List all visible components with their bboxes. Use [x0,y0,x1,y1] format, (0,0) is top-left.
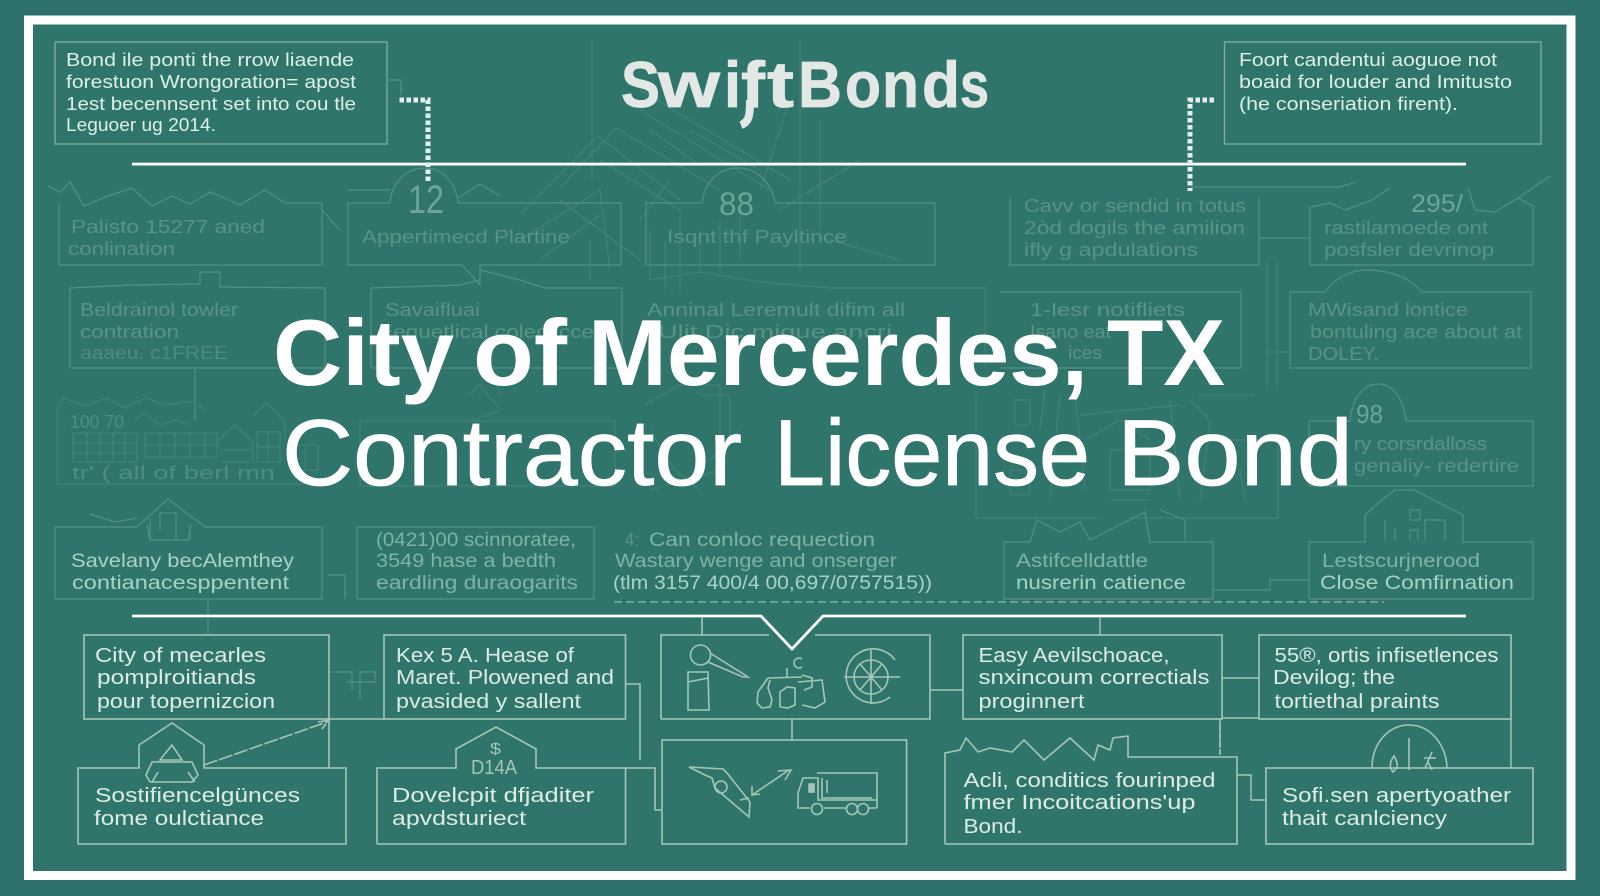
text block: Can conloc requection: Can conloc requection [649,530,875,551]
panel: Acli conditics [945,722,1266,844]
panel: Lestscurjnerood [1213,490,1533,599]
panel row 6 [78,719,1533,844]
logo: S [621,48,660,121]
panel: Acli conditics: Acli, conditics fourinped [964,770,1216,792]
panel: Lestscurjnerood: Lestscurjnerood [1322,551,1480,572]
faded panel: Beldrainol towler: aaaeu. c1FREE [80,342,228,363]
panel: Easy: snxincoum correctials [978,667,1210,689]
panel: Dovelcpit: apvdsturiect [392,808,527,830]
faded panel: Palisto: conlination [68,238,175,259]
panel: Savelany: contianacesppentent [72,572,290,594]
panel: scinnoratee: 3549 hase a bedth [376,551,556,572]
faded panel: Isqnt thf Payltince [646,168,935,265]
faded panel: 295: posfsler devrinop [1324,239,1494,260]
callout: top right [1224,42,1541,144]
faded panel: MWisand lontice: bontuling ace about at [1310,321,1522,342]
dashed connector [614,601,1384,603]
panel: 55: tortiethal praints [1274,691,1440,713]
faded panel: central building [976,390,1278,518]
panel: City of mecarles: pour topernizcion [97,691,275,713]
text block: Can conloc requection: (tlm 3157 400/4 00,697/0757515)) [613,572,932,594]
title line 1: TX [1107,300,1225,405]
panel: icons bottom [662,719,907,844]
panel: 55: 55®, ortis infisetlences [1274,645,1498,667]
title line 2: Contractor [282,400,742,505]
faded blueprint building drawing behind the logo [520,40,900,290]
faded panel: Anninal Leremult: Anninal Leremult difim all [647,299,905,320]
faded panel: Appertimecd Plartine [348,168,621,285]
title line 1: City [273,300,454,405]
panel: scinnoratee: eardling duraogarits [376,573,578,594]
panel: icons top [661,617,930,719]
panel: scinnoratee [328,527,594,599]
logo: f [741,48,765,121]
faded panel: MWisand lontice: MWisand lontice [1308,299,1468,320]
panel: City of mecarles [84,617,375,719]
panel row 4 [55,490,1533,636]
panel: Kex 5 A: Maret. Plowened and [396,667,614,689]
panel: Dovelcpit: D14A [471,757,518,779]
title line 1: of [473,300,568,405]
arrow: diagonal [204,720,329,765]
panel: Kex 5 A [329,635,661,810]
connector: dotted left [400,100,428,183]
faded panel: Palisto [48,182,340,265]
text block: Can conloc requection: Wastary wenge and onserger [615,551,898,572]
icon: vehicle [146,745,198,782]
callout: top left: 1est becennsent set into cou tle [66,94,356,114]
faded panel: Palisto: Palisto 15277 aned [71,216,265,237]
faded panel: Beldrainol towler: Beldrainol towler [80,299,238,320]
faded panel: Cavv or sendid: ifly g apdulations [1024,239,1198,260]
faded panel: Savaifluai: Eequetlical colecticce [378,321,594,342]
divider bottom with notch [132,616,1466,649]
faded panel: 295: rastilamoede ont [1324,217,1488,238]
faded panel: Beldrainol towler: contration [80,321,179,342]
faded panel: skyline and houses [57,398,320,484]
faded panel: Savaifluai: Savaifluai [385,299,480,320]
panel: Sofi.sen: thait canlciency [1282,808,1447,830]
logo: i [724,48,741,121]
panel: Astifcelldattle: nusrerin catience [1016,572,1186,594]
panel: 55: Devilog; the [1273,667,1395,689]
icon: figures [1390,738,1436,772]
icon: person with pencil [688,645,748,710]
panel: Easy: Easy Aevilschoace, [978,645,1170,667]
panel: Sofi.sen [1266,725,1533,844]
panel: Dovelcpit: Dovelcpit dfjaditer [392,785,594,807]
faded panel: Isqnt thf Payltince: Isqnt thf Payltince [667,226,847,247]
panel: Astifcelldattle [1004,510,1213,599]
panel: Sostifiencelgunces: fome oulctiance [94,808,264,830]
faded panel: 295: 295/ [1411,190,1463,218]
faded panel: 1-lesr notifliets: ices [1068,342,1102,363]
panel: Sostifiencelgunces: Sostifiencelgünces [95,785,300,807]
text block: Can conloc requection: 4: [625,529,639,550]
icon: target [844,649,900,704]
logo: s [960,48,989,121]
panel: City of mecarles: City of mecarles [95,645,266,667]
callout: top left [55,42,401,144]
panel: Savelany [55,499,322,636]
panel: Lestscurjnerood: Close Comfirnation [1320,572,1514,594]
connector: dotted right [1190,100,1214,191]
panel: Kex 5 A: Kex 5 A. Hease of [396,645,574,667]
faded panel row 2 [70,260,1531,420]
faded panel: skyline and houses: tr' ( all of berl mn [72,462,275,483]
panel: Savelany: Savelany becAlemthey [71,550,294,572]
faded panel: 1-lesr notifliets: 1-lesr notifliets [1030,299,1185,320]
panel: 55 [1220,635,1511,768]
logo: n [882,48,919,121]
panel: Acli conditics: fmer Incoitcations'up [964,792,1196,814]
faded panel: ry corsrdalloss [1309,384,1533,486]
logo [621,48,989,125]
faded panel: Savaifluai [371,270,622,368]
faded panel: Anninal Leremult: Ulit Dic mique ancri [658,321,892,342]
panel: Sofi.sen: Sofi.sen apertyoather [1282,785,1511,807]
title line 2: License [774,400,1090,505]
faded panel: ry corsrdalloss: 98 [1356,399,1383,429]
callout: top right: (he conseriation firent). [1239,94,1458,114]
title [273,300,1353,505]
faded panel: central outline [360,380,740,490]
icon: truck [798,773,877,814]
icon: house [1385,510,1445,540]
faded panel: 295 [1190,176,1550,265]
text block: Can conloc requection [613,529,932,594]
panel: Kex 5 A: pvasided y sallent [396,691,582,713]
logo: w [657,48,721,121]
panel: Easy [930,617,1222,719]
faded panel: Cavv or sendid [1010,195,1310,265]
panel: City of mecarles: pomplroitiands [97,667,256,689]
logo: B [798,48,842,121]
panel: Sostifiencelgunces [78,719,346,844]
faded panel: 1-lesr notifliets: Isano eat [1030,321,1111,342]
panel row 5 [84,617,1511,810]
panel: Astifcelldattle: Astifcelldattle [1016,551,1148,572]
faded panel: MWisand lontice [1290,270,1531,368]
faded panel: 1-lesr notifliets [1000,260,1290,390]
callout: top left: Leguoer ug 2014. [66,115,216,135]
callout: top right: boaid for louder and Imitusto [1239,72,1512,92]
title line 2: Bond [1117,400,1353,505]
panel: scinnoratee: (0421)00 scinnoratee, [376,530,576,551]
icon: house tools [147,513,191,540]
faded panel: ry corsrdalloss: ry corsrdalloss [1354,433,1487,454]
callout: top right: Foort candentui aoguoe not [1239,50,1497,70]
faded panel: Cavv or sendid: Cavv or sendid in totus [1024,195,1246,216]
faded panel: Beldrainol towler [70,272,325,420]
panel: Dovelcpit [377,727,626,844]
logo: d [922,48,960,121]
arrow: double headed [752,770,791,795]
title line 1: Mercerdes, [588,300,1088,405]
panel: Dovelcpit: $ [490,741,501,758]
faded panel: Appertimecd Plartine: 12 [408,178,444,222]
callout: top left: Bond ile ponti the rrow liaende [66,50,354,70]
faded panel: Isqnt thf Payltince: 88 [719,186,754,222]
icon: knife tool [689,767,750,817]
faded panel: Appertimecd Plartine: Appertimecd Plartine [362,226,570,247]
faded panel row 3 [57,380,1533,518]
callout: top left: forestuon Wrongoration= apost [66,72,356,92]
logo: o [845,48,881,121]
panel: Acli conditics: Bond. [964,816,1022,838]
logo: t [767,48,794,121]
panel: Easy: proginnert [978,691,1085,713]
faded panel: Anninal Leremult [647,272,985,368]
divider top [132,163,1466,166]
icon: hands [757,658,825,708]
faded panel row 1 [48,168,1550,285]
faded panel: Cavv or sendid: 2òd dogils the amilion [1024,217,1245,238]
faded panel: skyline and houses: 100 70 [70,411,124,432]
faded panel: ry corsrdalloss: genaliy- redertire [1354,455,1519,476]
faded panel: MWisand lontice: DOLEY. [1308,343,1379,364]
